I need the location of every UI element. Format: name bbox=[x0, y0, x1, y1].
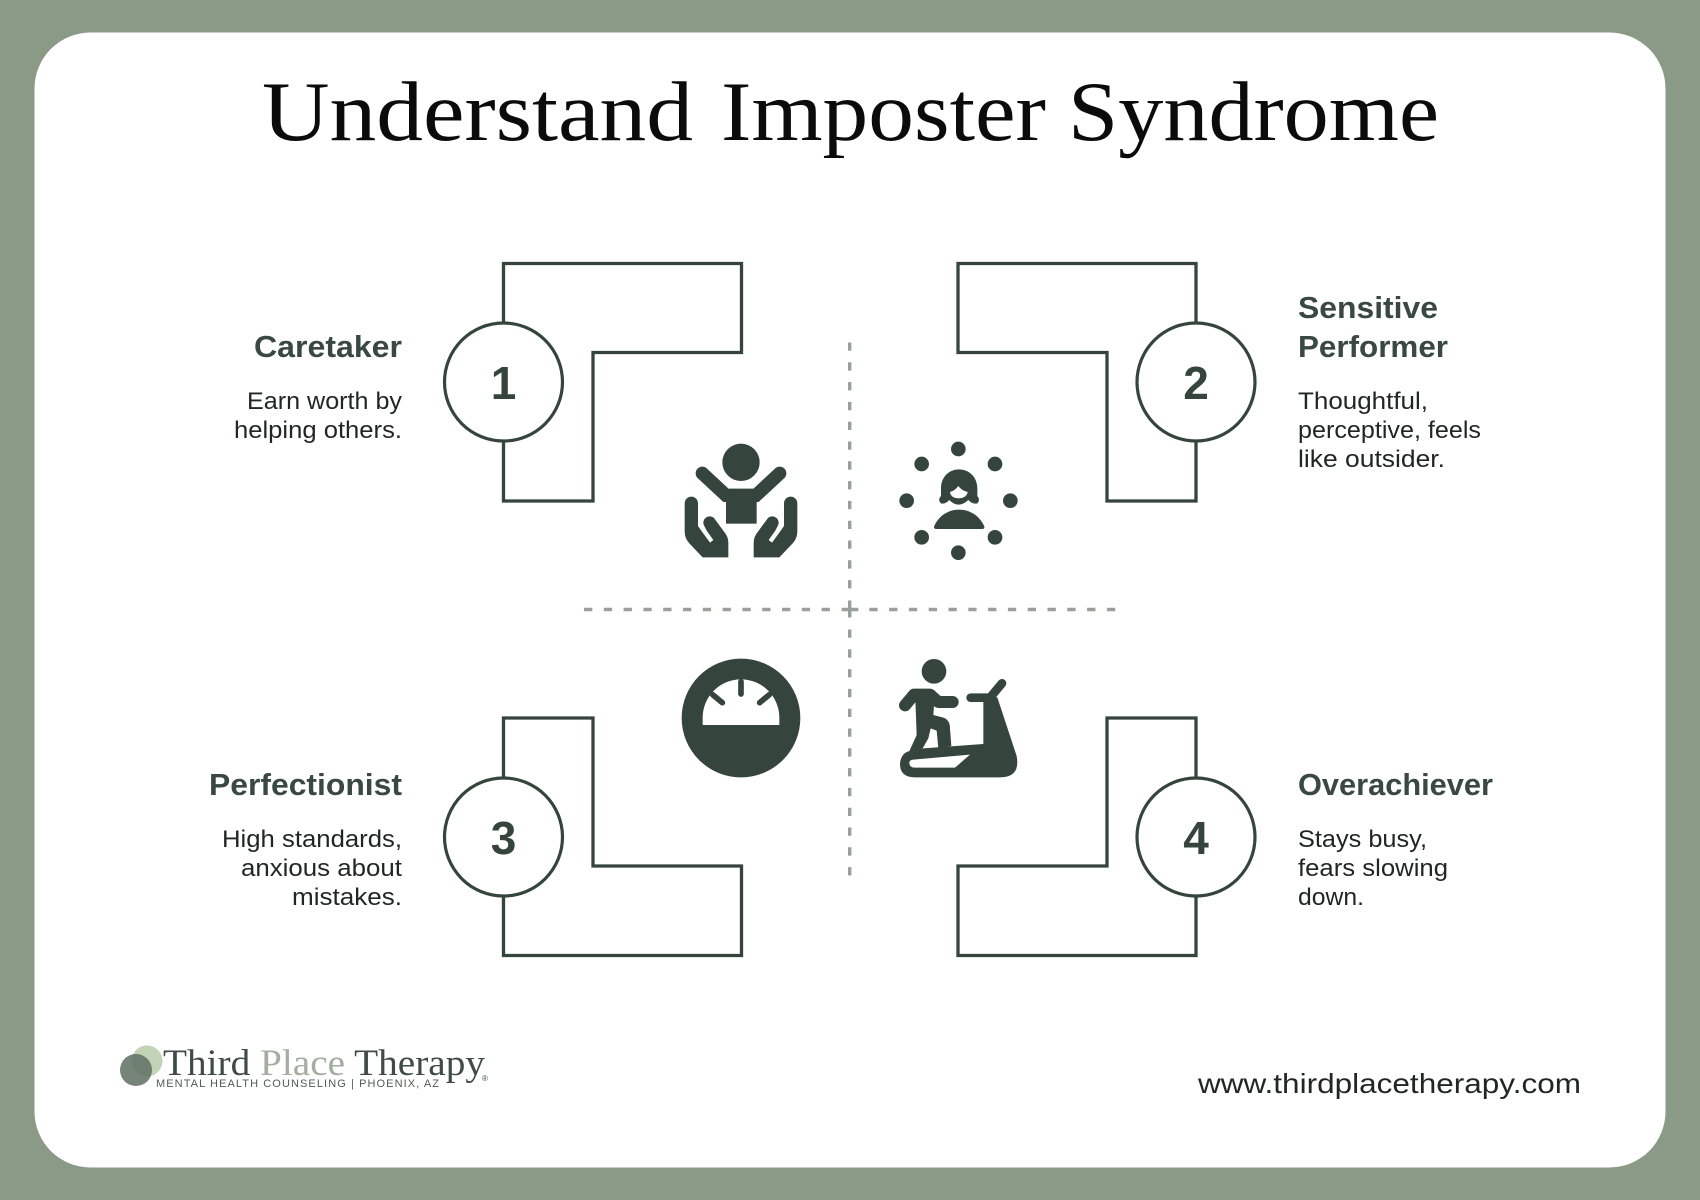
number badge 3: 3 bbox=[491, 812, 516, 864]
icon: person surrounded by dots bbox=[899, 442, 1018, 560]
description: Sensitive Performer: Thoughtful, bbox=[1298, 388, 1428, 415]
heading: Sensitive Performer bbox=[1298, 290, 1448, 364]
icon: hands holding person bbox=[685, 444, 797, 557]
description: Sensitive Performer: like outsider. bbox=[1298, 446, 1445, 473]
logo wordmark: Third Place Therapy bbox=[163, 1043, 486, 1084]
panel 1: caretaker bbox=[234, 264, 742, 501]
heading: Caretaker: Caretaker bbox=[254, 329, 402, 364]
description: Caretaker bbox=[234, 388, 403, 444]
description: Perfectionist bbox=[222, 826, 402, 911]
number badge 1 bbox=[444, 323, 562, 441]
description: Caretaker: Earn worth by bbox=[247, 388, 403, 415]
number badge 2: 2 bbox=[1183, 357, 1209, 409]
description: Sensitive Performer bbox=[1298, 388, 1481, 473]
description: Perfectionist: High standards, bbox=[222, 826, 402, 853]
L-shaped outline 4 bbox=[958, 718, 1196, 956]
title bbox=[262, 65, 1439, 159]
dashed dividers bbox=[584, 342, 1118, 880]
logo mark bbox=[120, 1046, 162, 1086]
description: Sensitive Performer: perceptive, feels bbox=[1298, 417, 1481, 444]
description: Overachiever: Stays busy, bbox=[1298, 826, 1427, 853]
description: Overachiever bbox=[1298, 826, 1448, 911]
icon: weighing scale bbox=[682, 659, 800, 777]
description: Overachiever: down. bbox=[1298, 884, 1364, 911]
description: Overachiever: fears slowing bbox=[1298, 855, 1448, 882]
heading: Perfectionist: Perfectionist bbox=[209, 767, 402, 802]
heading: Sensitive Performer: Performer bbox=[1298, 329, 1448, 364]
number badge 2 bbox=[1137, 323, 1255, 441]
registered mark: ® bbox=[482, 1074, 488, 1083]
title: Imposter bbox=[721, 65, 1046, 159]
panel 3: perfectionist bbox=[209, 718, 742, 956]
logo tagline: MENTAL HEALTH COUNSELING | PHOENIX, AZ bbox=[156, 1078, 439, 1090]
description: Perfectionist: anxious about bbox=[241, 855, 402, 882]
L-shaped outline 3 bbox=[504, 718, 742, 956]
icon: person on treadmill bbox=[900, 659, 1017, 777]
title: Syndrome bbox=[1068, 65, 1439, 159]
description: Caretaker: helping others. bbox=[234, 417, 402, 444]
title: Understand bbox=[262, 65, 693, 159]
heading: Sensitive Performer: Sensitive bbox=[1298, 290, 1438, 325]
panel 4: overachiever bbox=[958, 718, 1493, 956]
number badge 3 bbox=[444, 778, 562, 896]
website url: www.thirdplacetherapy.com bbox=[1197, 1068, 1581, 1099]
logo: Third Place Therapy bbox=[120, 1043, 488, 1090]
number badge 4 bbox=[1137, 778, 1255, 896]
number badge 4: 4 bbox=[1183, 812, 1209, 864]
description: Perfectionist: mistakes. bbox=[292, 884, 402, 911]
panel 2: sensitive performer bbox=[958, 264, 1481, 501]
L-shaped outline 2 bbox=[958, 264, 1196, 501]
heading: Overachiever: Overachiever bbox=[1298, 767, 1493, 802]
number badge 1: 1 bbox=[491, 357, 516, 409]
L-shaped outline 1 bbox=[504, 264, 742, 501]
